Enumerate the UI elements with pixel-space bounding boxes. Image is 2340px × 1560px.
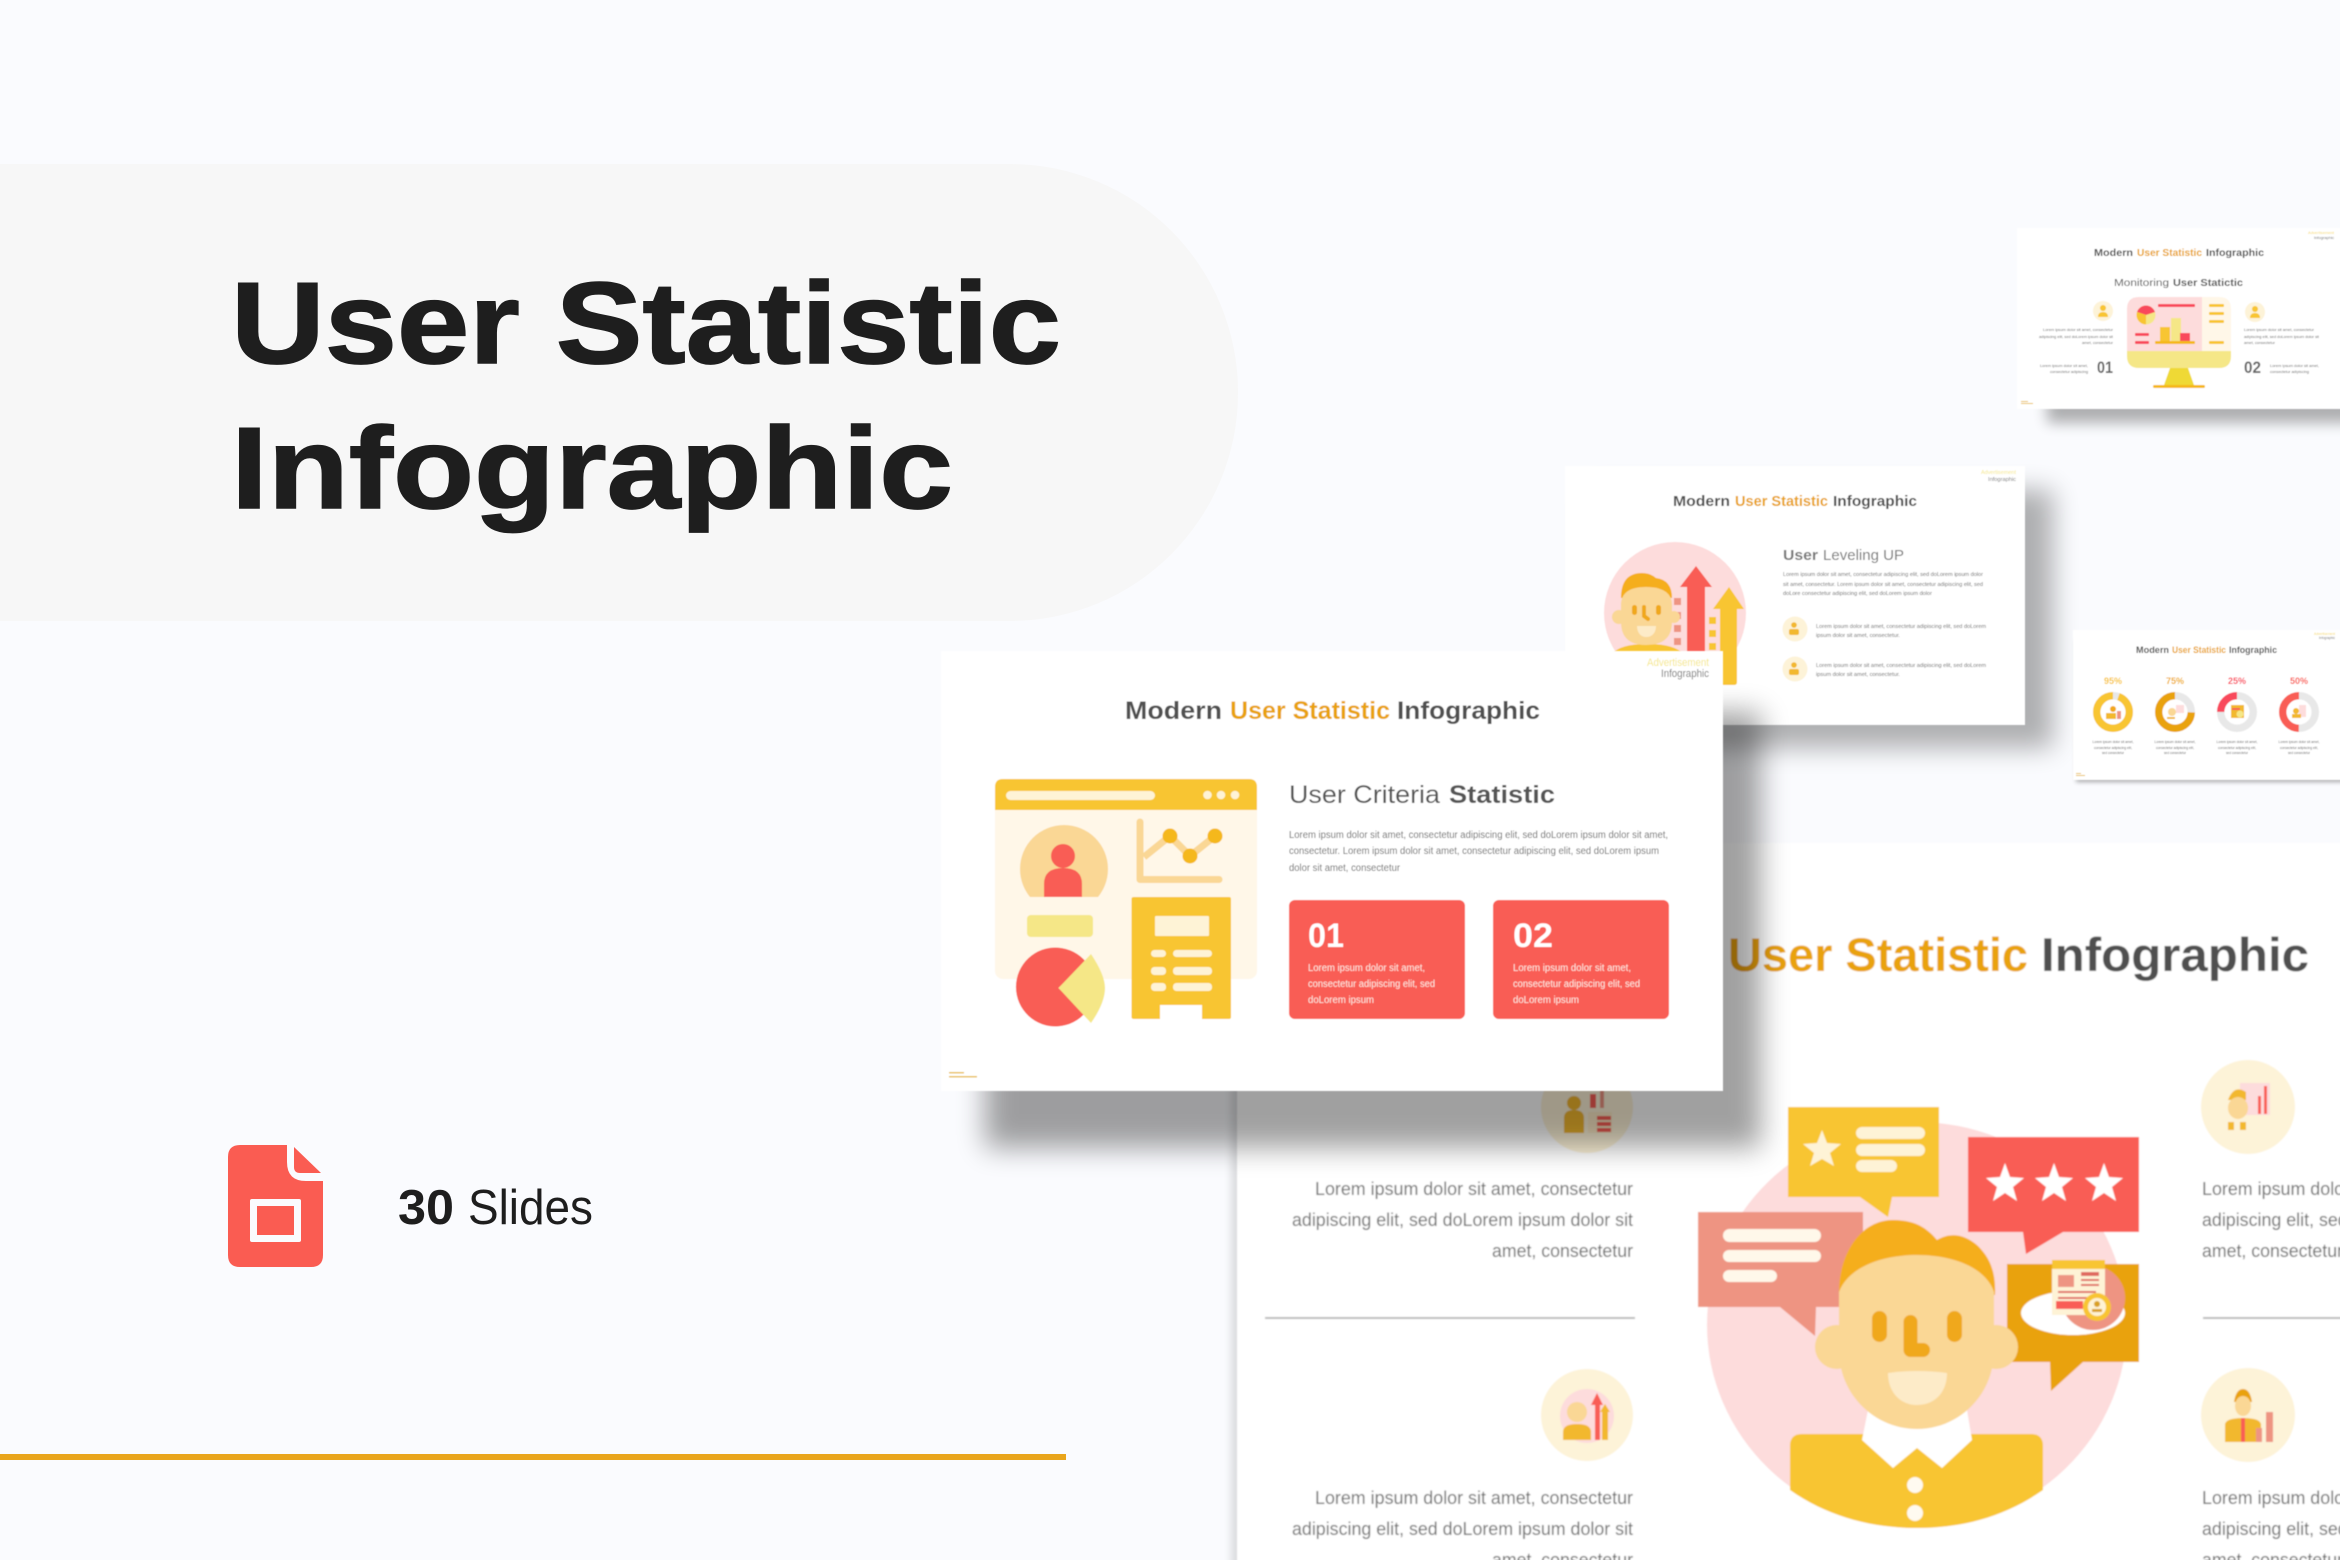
leveling slide brand tag: Advertisement	[1981, 470, 2016, 476]
leveling slide paragraph: Lorem ipsum dolor sit amet, consectetur adipiscing elit, sed doLorem ipsum dolor	[1783, 572, 1983, 578]
icon: presenter with table	[1541, 1061, 1633, 1153]
right column: point 02	[2244, 302, 2319, 377]
icon: user in tie with bars	[2201, 1368, 2295, 1462]
monitoring slide brand tag	[2308, 230, 2335, 240]
text: upper left: Lorem ipsum dolor sit amet, consectetur	[1315, 1179, 1633, 1199]
donut: 75%: sed consectetur	[2164, 751, 2187, 755]
donut: 75%: consectetur adipiscing elit,	[2156, 746, 2194, 750]
front slide paragraph: dolor sit amet, consectetur	[1289, 863, 1401, 874]
percentage slide title	[2136, 645, 2277, 655]
item: first leveling point	[1782, 616, 1986, 642]
card 02: doLorem ipsum	[1513, 995, 1579, 1006]
card 01: Lorem ipsum dolor sit amet,	[1308, 963, 1425, 974]
panel: monitoring slide	[2017, 228, 2340, 409]
leveling slide title: Modern	[1673, 493, 1730, 510]
front slide paragraph	[1289, 830, 1668, 874]
leveling slide brand tag	[1981, 470, 2016, 483]
monitoring slide title: Modern	[2094, 247, 2133, 259]
text: lower left	[1292, 1488, 1633, 1560]
character body	[1790, 1410, 2043, 1528]
percentage slide title: Infographic	[2229, 645, 2277, 655]
monitoring slide title: Infographic	[2206, 247, 2264, 259]
donut: 75%: Lorem ipsum dolor sit amet,	[2154, 740, 2196, 744]
item: second leveling point	[1782, 656, 1986, 682]
shadow: front slide	[985, 712, 1761, 1148]
monitoring slide heading	[2114, 277, 2243, 289]
user avatar	[1020, 824, 1108, 898]
right column: point 02: 02	[2244, 358, 2261, 377]
illustration: user with review bubbles	[1698, 1107, 2139, 1528]
leveling slide heading: User	[1783, 547, 1818, 564]
left column: point 01: consectetur adipiscing	[2050, 370, 2088, 374]
donut: 50%: 50%	[2290, 676, 2308, 686]
front slide brand tag: Infographic	[1661, 668, 1709, 680]
accent rule	[0, 1454, 1066, 1460]
donut: 75%: 75%	[2166, 676, 2184, 686]
left column: point 01: adipiscing elit, sed doLorem ipsum dolor sit	[2039, 335, 2113, 339]
line chart	[1140, 822, 1222, 880]
donut: 95%: 95%	[2104, 676, 2122, 686]
left column: point 01: Lorem ipsum dolor sit amet,	[2040, 364, 2088, 368]
front slide title	[1125, 697, 1540, 725]
percentage slide brand tag: Advertisement	[2314, 632, 2335, 636]
large slide title: Infographic	[2041, 928, 2309, 981]
leveling slide title	[1673, 493, 1917, 510]
text: lower left: adipiscing elit, sed doLorem ipsum dolor sit	[1292, 1519, 1633, 1539]
monitoring slide title: User Statistic	[2137, 247, 2202, 259]
item: first leveling point: Lorem ipsum dolor sit amet, consectetur adipiscing elit, sed doLorem	[1816, 624, 1986, 630]
bubble: star note	[1788, 1107, 1939, 1217]
slide count label: Slides	[468, 1181, 593, 1235]
donut: 95%: consectetur adipiscing elit,	[2094, 746, 2132, 750]
front slide brand tag: Advertisement	[1647, 657, 1709, 669]
bubble: three stars	[1968, 1137, 2139, 1254]
donut: 50%: consectetur adipiscing elit,	[2280, 746, 2318, 750]
donut: 75%	[2154, 676, 2196, 755]
card 01: doLorem ipsum	[1308, 995, 1374, 1006]
front slide title: User Statistic	[1230, 697, 1390, 725]
right column: point 02: Lorem ipsum dolor sit amet, consectetur	[2244, 328, 2315, 332]
donut: 25%: Lorem ipsum dolor sit amet,	[2216, 740, 2258, 744]
card 02	[1493, 900, 1669, 1019]
donut: 25%: consectetur adipiscing elit,	[2218, 746, 2256, 750]
right column: point 02: adipiscing elit, sed doLorem ipsum dolor sit	[2244, 335, 2319, 339]
percentage slide brand tag	[2314, 632, 2335, 640]
title	[231, 258, 1061, 533]
monitoring slide heading: Monitoring	[2114, 277, 2169, 289]
monitoring slide heading: User Statictic	[2173, 277, 2243, 289]
browser window	[995, 779, 1257, 979]
leveling slide paragraph	[1783, 572, 1983, 597]
left column: point 01	[2039, 301, 2114, 377]
text: lower right	[2202, 1488, 2340, 1560]
front slide brand tag	[1647, 657, 1709, 680]
panel: user leveling slide	[1565, 466, 2025, 725]
icon: user with chart	[2201, 1060, 2295, 1154]
character head	[1815, 1220, 2018, 1429]
leveling slide title: User Statistic	[1735, 493, 1828, 510]
slide count label	[398, 1181, 593, 1235]
text: upper left: adipiscing elit, sed doLorem ipsum dolor sit	[1292, 1210, 1633, 1230]
right column: point 02: consectetur adipiscing	[2270, 370, 2309, 374]
item: second leveling point: ipsum dolor sit amet, consectetur.	[1816, 672, 1900, 678]
front slide title: Modern	[1125, 697, 1222, 725]
title: User Statistic	[231, 258, 1061, 388]
shadow: large slide	[1231, 860, 2340, 1560]
pie chart	[1016, 947, 1105, 1026]
donut: 95%: sed consectetur	[2102, 751, 2125, 755]
front slide corner mark	[949, 1072, 977, 1078]
card 01: consectetur adipiscing elit, sed	[1308, 979, 1435, 990]
leveling slide paragraph: sit amet, consectetur. Lorem ipsum dolor sit amet, consectetur adipiscing elit, sed	[1783, 582, 1983, 588]
front slide heading: User Criteria	[1289, 781, 1440, 809]
icon: user with arrows	[1541, 1369, 1633, 1461]
shadow: percentage slide	[2076, 640, 2340, 782]
right column: point 02: amet, consectetur	[2244, 341, 2276, 345]
left column: point 01: Lorem ipsum dolor sit amet, consectetur	[2043, 328, 2114, 332]
checklist board	[1132, 897, 1231, 1019]
shadow: leveling slide	[1590, 490, 2053, 748]
card 02: Lorem ipsum dolor sit amet,	[1513, 963, 1631, 974]
card 01: 01	[1308, 917, 1344, 955]
card 02: 02	[1513, 917, 1553, 955]
item: first leveling point: ipsum dolor sit amet, consectetur.	[1816, 633, 1900, 639]
panel: large slide user statistic	[1237, 843, 2340, 1560]
panel: user criteria slide	[941, 651, 1723, 1091]
percentage slide brand tag: Infographic	[2319, 636, 2335, 640]
text: lower left: Lorem ipsum dolor sit amet, consectetur	[1315, 1488, 1633, 1508]
front slide paragraph: consectetur. Lorem ipsum dolor sit amet, consectetur adipiscing elit, sed doLorem ipsum	[1289, 846, 1659, 857]
donut: 50%	[2278, 676, 2320, 755]
large slide title	[1728, 928, 2309, 981]
title background pill	[0, 164, 1238, 621]
donut: 50%: Lorem ipsum dolor sit amet,	[2278, 740, 2320, 744]
percentage slide title: User Statistic	[2172, 645, 2226, 655]
illustration: dashboard monitor	[2127, 297, 2231, 388]
monitoring slide brand tag: Infographic	[2314, 235, 2334, 240]
card 02: consectetur adipiscing elit, sed	[1513, 979, 1640, 990]
dividers	[1265, 1317, 2340, 1319]
illustration: leveling up	[1604, 542, 1746, 685]
monitoring slide title	[2094, 247, 2264, 259]
panel: percentage slide	[2073, 630, 2340, 780]
donut: 25%: sed consectetur	[2226, 751, 2249, 755]
text: upper left	[1292, 1179, 1633, 1261]
title: Infographic	[231, 403, 953, 533]
percentage slide corner mark	[2076, 773, 2085, 776]
text: upper right	[2202, 1179, 2340, 1261]
leveling slide brand tag: Infographic	[1988, 477, 2016, 483]
shadow: monitoring slide	[2047, 255, 2340, 423]
monitoring slide corner mark	[2021, 401, 2033, 404]
leveling slide paragraph: doLore consectetur adipiscing elit, sed doLorem ipsum dolor	[1783, 591, 1932, 597]
donut: 25%	[2216, 676, 2258, 755]
bubble: report and badge	[2007, 1260, 2139, 1391]
right column: point 02: Lorem ipsum dolor sit amet,	[2270, 364, 2319, 368]
donut: 95%: Lorem ipsum dolor sit amet,	[2092, 740, 2134, 744]
label pill	[1027, 915, 1093, 937]
leveling slide heading	[1783, 547, 1904, 564]
donut: 50%: sed consectetur	[2288, 751, 2311, 755]
front slide paragraph: Lorem ipsum dolor sit amet, consectetur adipiscing elit, sed doLorem ipsum dolor sit amet,	[1289, 830, 1668, 841]
left column: point 01: 01	[2097, 358, 2113, 377]
item: second leveling point: Lorem ipsum dolor sit amet, consectetur adipiscing elit, sed doLorem	[1816, 663, 1986, 669]
text: upper left: amet, consectetur	[1492, 1241, 1633, 1261]
card 01	[1289, 900, 1465, 1019]
leveling slide title: Infographic	[1833, 493, 1917, 510]
donut: 95%	[2092, 676, 2134, 755]
leveling slide heading: Leveling UP	[1823, 547, 1904, 564]
bubble: text lines	[1698, 1212, 1863, 1336]
left column: point 01: amet, consectetur	[2082, 341, 2114, 345]
slide count label: 30	[398, 1181, 454, 1235]
front slide title: Infographic	[1397, 697, 1540, 725]
monitoring slide brand tag: Advertisement	[2308, 230, 2335, 235]
donut: 25%: 25%	[2228, 676, 2246, 686]
percentage slide title: Modern	[2136, 645, 2169, 655]
front slide heading: Statistic	[1449, 781, 1555, 809]
front slide heading	[1289, 781, 1555, 809]
icon: slides file	[228, 1145, 323, 1267]
illustration: user dashboard	[995, 779, 1257, 1026]
large slide title: User Statistic	[1728, 928, 2028, 981]
